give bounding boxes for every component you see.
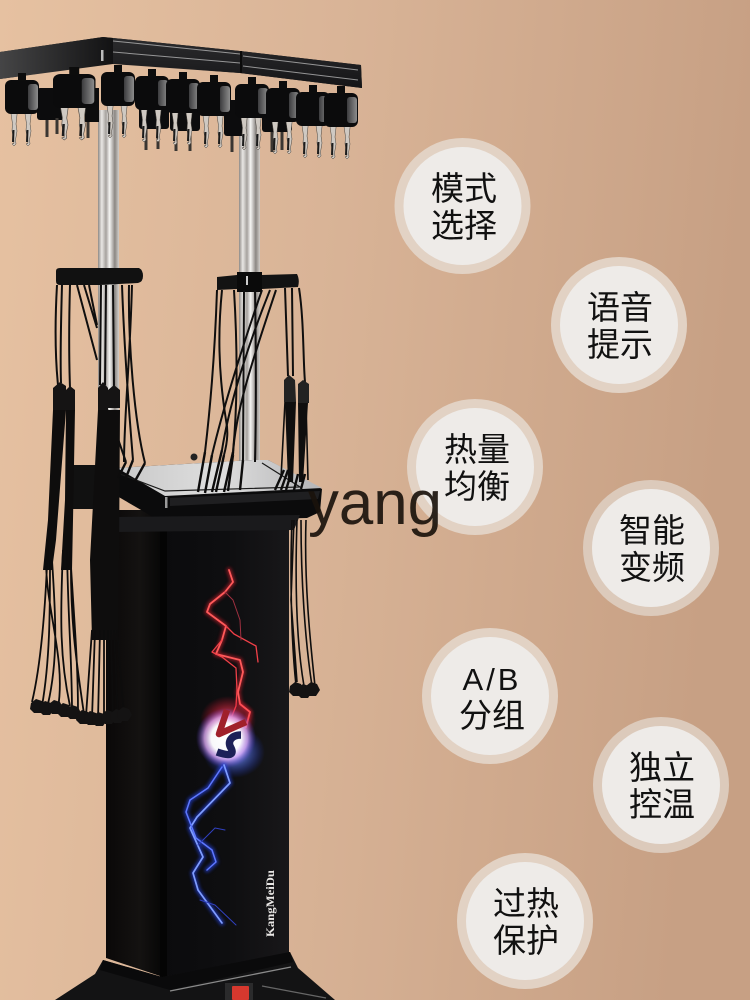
- feature badge: overheat protection: 过热: [493, 885, 559, 922]
- left cable bundles: [32, 540, 124, 722]
- right wire collar: [217, 272, 299, 292]
- feature badge: mode select: 选择: [431, 207, 497, 244]
- feature badge: A/B groups: A/B: [463, 662, 521, 697]
- rear heater units: [37, 88, 292, 152]
- main body column: [106, 510, 289, 977]
- wire collars and cables: [30, 268, 320, 726]
- watermark: yang: [308, 469, 442, 538]
- feature badge: A/B groups: 分组: [459, 697, 525, 734]
- hanging heater units: [5, 65, 358, 159]
- right wire tips: [289, 682, 320, 698]
- feature badge: voice prompt: 提示: [587, 326, 653, 363]
- left wire collar: [56, 268, 143, 285]
- feature badge: voice prompt: 语音: [587, 289, 653, 326]
- feature badge: A/B groups: [422, 628, 558, 764]
- feature badge: overheat protection: 保护: [493, 922, 559, 959]
- feature badge: smart frequency: 变频: [619, 549, 685, 586]
- feature badge: smart frequency: 智能: [619, 512, 685, 549]
- top heating rack: [0, 37, 362, 159]
- left cable tapers: [43, 410, 120, 640]
- magnet glow: [196, 696, 265, 778]
- power switch: [225, 983, 253, 1000]
- feature badge: voice prompt: [551, 257, 687, 393]
- wire tips: [30, 699, 132, 726]
- left cables upper: [56, 285, 145, 463]
- control head: [115, 454, 322, 532]
- feature badge: overheat protection: [457, 853, 593, 989]
- feature badge: independent temperature: 控温: [629, 786, 695, 823]
- chrome poles: [98, 110, 260, 475]
- feature badge: smart frequency: [583, 480, 719, 616]
- feature badge: balanced heat: 热量: [444, 431, 510, 468]
- right cables lower: [281, 402, 315, 686]
- feature badge: balanced heat: [407, 399, 543, 535]
- right cable tapers: [285, 402, 308, 482]
- cable stripes on control panel: [118, 450, 305, 493]
- blue lightning: [186, 765, 236, 925]
- right connectors: [284, 375, 309, 403]
- right cables upper: [205, 288, 305, 462]
- lightning graphic: [186, 570, 277, 937]
- magnet V and S poles: [217, 710, 246, 755]
- left connectors: [53, 382, 120, 410]
- base with switch: [55, 952, 335, 1000]
- feature badge: independent temperature: [593, 717, 729, 853]
- back bracket: [70, 465, 100, 509]
- feature badge: mode select: [394, 138, 530, 274]
- feature badge: balanced heat: 均衡: [444, 468, 510, 505]
- machine: [0, 37, 362, 1000]
- brand name: KangMeiDu: [263, 870, 277, 937]
- feature badge: mode select: 模式: [431, 170, 497, 207]
- feature badge: independent temperature: 独立: [629, 749, 695, 786]
- red lightning: [207, 570, 258, 727]
